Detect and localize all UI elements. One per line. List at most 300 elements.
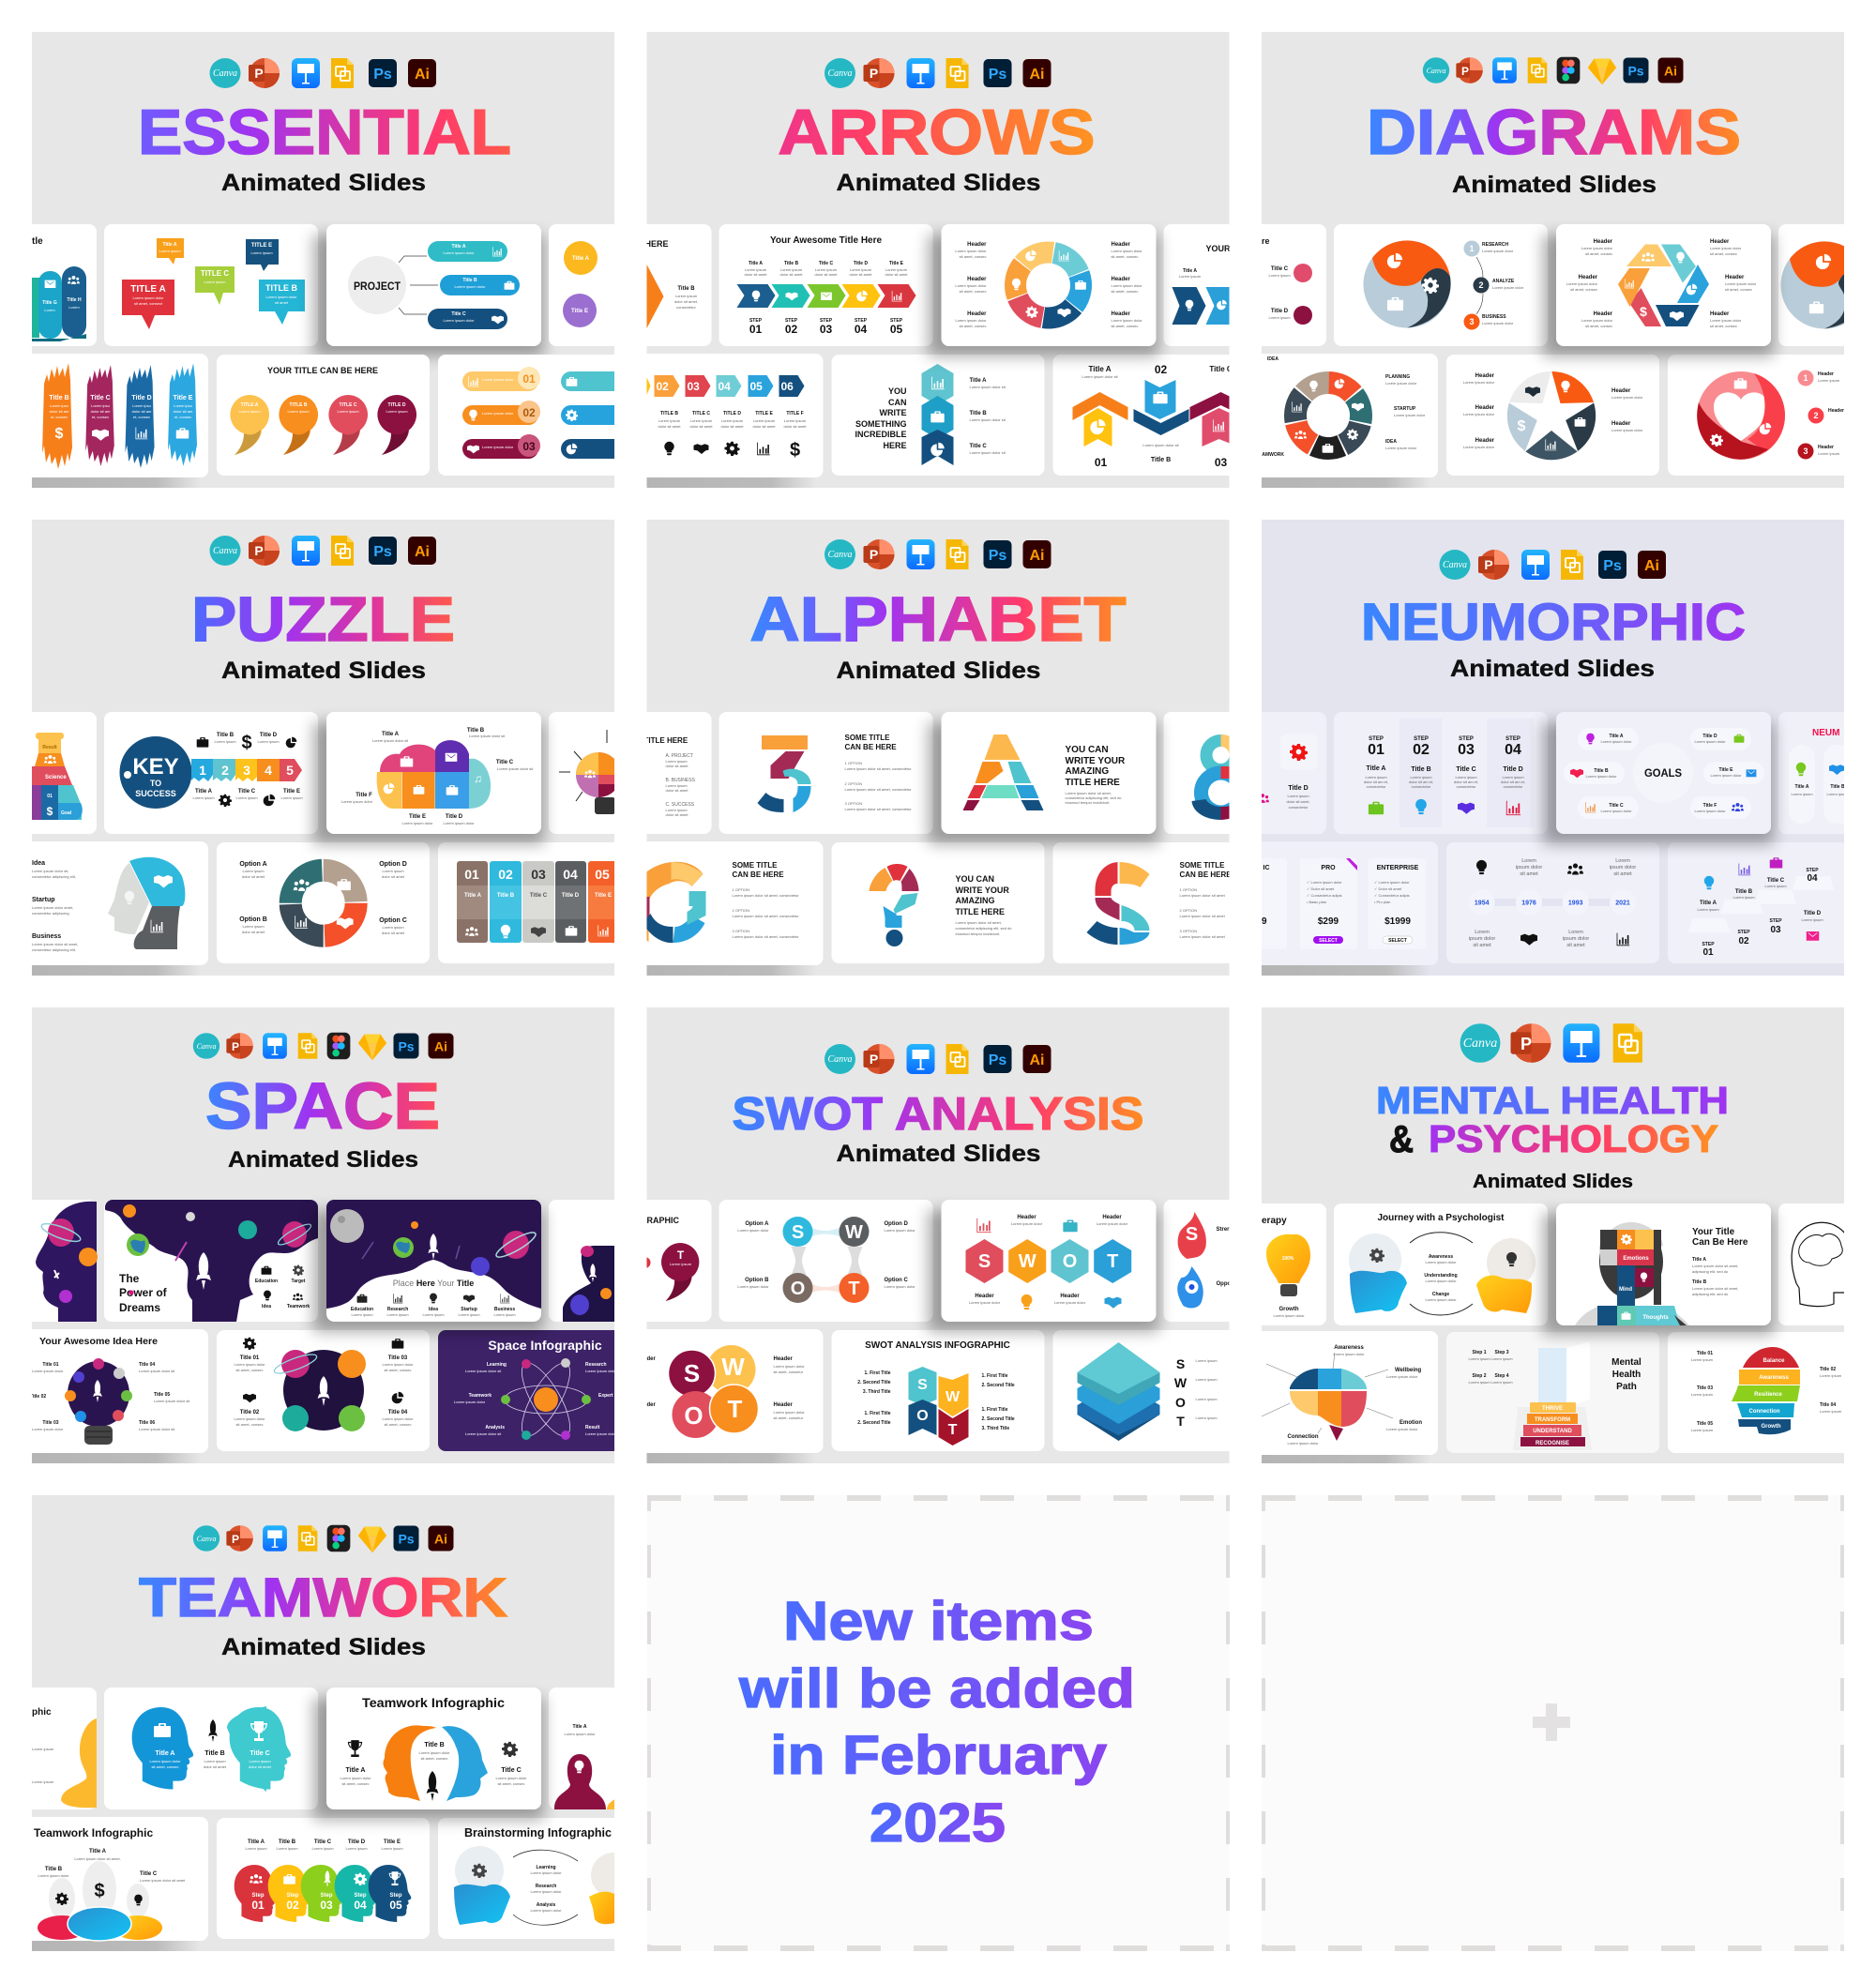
card: vertical ribbon arrows: Title B xyxy=(970,411,987,416)
card: two heads: dolor sit amet xyxy=(204,1764,227,1769)
card: head with pieces: Lorem ipsum dolor sit amet, xyxy=(32,942,78,946)
card: two heads: Lorem ipsum xyxy=(249,1759,271,1764)
card: letter S: 3 OPTION xyxy=(1180,929,1197,933)
card: rising steps: Lorem ipsum xyxy=(1801,917,1823,922)
card: numbered pills: 01 xyxy=(522,372,536,386)
card: rising steps: Title C xyxy=(1767,878,1785,884)
card: watercolour letters: Opportun xyxy=(1216,1281,1242,1287)
card: vertical ribbon arrows: CAN xyxy=(888,398,906,407)
card: quote bubbles: Lorem ipsum xyxy=(287,409,310,414)
card: blobs: Title E xyxy=(571,309,588,314)
card: flask puzzle xyxy=(23,712,97,834)
card: space infographic dark xyxy=(438,1330,626,1451)
card: space infographic dark: Research xyxy=(585,1362,607,1368)
card: chevron ring fragment: Title A xyxy=(1183,268,1197,274)
card: puzzle ring: STARTUP xyxy=(1394,406,1416,412)
card: star ring: Lorem ipsum dolor xyxy=(1611,395,1643,400)
card: five step heads xyxy=(217,1818,430,1939)
card: five step chevrons: 05 xyxy=(890,323,902,336)
card: SWOT hexagons xyxy=(942,1200,1156,1322)
subtitle: Animated Slides xyxy=(837,658,1041,684)
card: four piece ring: Lorem ipsum xyxy=(242,869,265,873)
card: numbered puzzle columns: 01 xyxy=(464,867,479,882)
card: brush strokes: Title B xyxy=(49,395,69,401)
card: teamwork infographic merged heads: Lorem ipsum dolor xyxy=(495,1776,527,1780)
card: three part swirl: Lorem ipsum dolor xyxy=(1482,249,1514,253)
card: space infographic dark: Lorem ipsum dolor xyxy=(454,1400,486,1404)
card: star ring: Header xyxy=(1611,388,1631,394)
card: goals pills: Lorem ipsum dolor xyxy=(1600,809,1632,813)
card: pricing table: IC xyxy=(1263,865,1270,871)
card: pricing table: ✓ Lorem ipsum dolor xyxy=(1374,880,1410,885)
card: head with pieces: Startup xyxy=(32,897,54,903)
card: five step heads: 03 xyxy=(320,1899,333,1912)
card: letter S: Lorem ipsum dolor sit amet xyxy=(1180,893,1226,898)
card: brush strokes: dolor sit am xyxy=(132,409,152,414)
card: goals pills: Lorem ipsum dolor xyxy=(1585,774,1617,779)
card: vertical numbered tabs: dolor sit amet xyxy=(783,424,807,429)
card: speech bubbles: Lorem ipsum xyxy=(250,250,273,255)
card: fragment with maroon head: Title A xyxy=(572,1724,587,1730)
panel: Essential xyxy=(23,32,633,488)
card: cycle ring: Header xyxy=(967,277,987,282)
card: idea bulb: Title 06 xyxy=(139,1420,155,1426)
card: head with pieces: Lorem ipsum dolor sit, xyxy=(32,869,68,873)
card: comma fragment: T xyxy=(677,1249,685,1262)
card: speech bubbles: Lorem ipsum dolor xyxy=(132,295,164,300)
card: timeline: 1954 xyxy=(1475,901,1490,906)
card: head jigsaw: Thoughts xyxy=(1642,1315,1669,1321)
card: four steps: STEP xyxy=(1369,736,1384,742)
card: cloud puzzle: Title C xyxy=(496,760,514,765)
card: five step heads: Step xyxy=(251,1893,265,1899)
card: teamwork balloons: Title C xyxy=(140,1871,158,1877)
card: overlapping SWOT drops: der xyxy=(647,1402,657,1408)
card: chevron ring fragment: YOUR xyxy=(1206,244,1231,253)
card: four steps: Title C xyxy=(1456,766,1476,773)
card: rising steps: Title B xyxy=(1735,889,1753,895)
card: letter three: 3 OPTION xyxy=(844,801,862,806)
card: power of dreams: Target xyxy=(292,1279,306,1284)
card: key to success: KEY xyxy=(132,754,179,780)
card: yellow head fragment: Lorem ipsum xyxy=(32,1747,54,1751)
card: heart swirl: Lorem ipsum xyxy=(1818,451,1840,456)
card: four steps: Lorem ipsum xyxy=(1455,775,1477,780)
card: brain connections: Lorem ipsum dolor xyxy=(1386,1374,1418,1379)
card: power of dreams: The xyxy=(119,1272,140,1285)
card: head with pieces: Business xyxy=(32,933,61,940)
icon row: app logos: P xyxy=(870,1052,878,1067)
card: letter three: Lorem ipsum dolor sit amet, consectetur xyxy=(844,787,912,792)
card: journey with a psychologist: Journey with a Psychologist xyxy=(1377,1213,1505,1223)
card: project mind map: Title A xyxy=(451,244,466,250)
card: up and down arrows: Title B xyxy=(1151,457,1171,463)
card: five step chevrons: Title B xyxy=(784,261,798,266)
card: puzzle ring: IDEA xyxy=(1385,439,1397,445)
card: chevron ring fragment xyxy=(1163,224,1229,346)
card: idea bulb: Lorem ipsum dolor sit xyxy=(154,1399,190,1403)
card: title fragment: Title C xyxy=(1271,266,1289,272)
card: numbered pills: Lorem ipsum dolor xyxy=(482,377,514,382)
card: five step chevrons: Title C xyxy=(819,261,833,266)
card: planets around rocket: Title 04 xyxy=(388,1410,408,1415)
card: letter three: SOME TITLE xyxy=(844,734,890,742)
card: brush strokes: dolor sit am xyxy=(91,409,111,414)
card: timeline: 2021 xyxy=(1615,901,1630,906)
card: flags: Lorem xyxy=(68,305,80,310)
card: vertical numbered tabs: Lorem ipsum xyxy=(721,418,744,423)
card: mental health path: UNDERSTAND xyxy=(1533,1429,1572,1434)
card: vertical ribbon arrows: INCREDIBLE xyxy=(855,430,906,439)
card: up and down arrows: Title A xyxy=(1088,365,1112,373)
card: overlapping SWOT drops: T xyxy=(728,1395,743,1423)
card: overlapping SWOT drops: Header xyxy=(773,1402,794,1408)
card: pricing table: • Basic plan xyxy=(1307,900,1326,904)
card: timeline: sit amet xyxy=(1520,871,1538,877)
card: flask puzzle: Science xyxy=(45,775,67,780)
card: rising steps: Lorem ipsum xyxy=(1732,895,1755,900)
card: five step heads: Lorem ipsum xyxy=(381,1846,403,1851)
card: cycle ring: Header xyxy=(1111,242,1131,248)
card: journey with a psychologist: Understanding xyxy=(1424,1273,1458,1279)
card: five step heads: Title D xyxy=(348,1839,366,1845)
card: brain connections: Lorem ipsum dolor xyxy=(1386,1427,1418,1431)
card: idea bulb: Title 04 xyxy=(139,1362,155,1368)
card: five step chevrons: dolor sit amet xyxy=(885,272,908,277)
card: up and down arrows: Title C xyxy=(1209,365,1233,373)
card: cloud puzzle: Lorem ipsum dolor sit xyxy=(469,734,506,738)
card: vertical ribbon arrows: Title A xyxy=(970,378,987,384)
icon: plus xyxy=(1533,1703,1570,1741)
card: journey with a psychologist: Change xyxy=(1432,1292,1449,1297)
card: letter A xyxy=(942,712,1156,834)
card: project mind map: Lorem ipsum dolor xyxy=(454,284,486,289)
card: pricing table: ✓ Dolor sit amet xyxy=(1307,886,1335,891)
card: layered head: Balance xyxy=(1763,1358,1785,1364)
card: vertical ribbon arrows: Lorem ipsum dolor sit xyxy=(970,385,1006,389)
card: pill fragment: Lorem ipsum xyxy=(1826,792,1849,796)
card: journey with a psychologist: Lorem ipsum dolor xyxy=(1425,1260,1457,1264)
card: idea bulb xyxy=(23,1329,208,1453)
card: cycle ring: Lorem ipsum dolor xyxy=(1111,249,1142,253)
card: timeline: sit amet xyxy=(1613,871,1632,877)
card: four piece ring: Option C xyxy=(379,917,407,924)
card: vertical numbered tabs: 03 xyxy=(687,380,700,393)
card: vertical numbered tabs: TITLE F xyxy=(786,411,804,416)
card: five step heads: Lorem ipsum xyxy=(276,1846,298,1851)
icon row: app logos xyxy=(193,1525,454,1552)
card: text list xyxy=(638,712,711,834)
card: four steps: consectetur xyxy=(1504,784,1523,789)
card: key to success: TO xyxy=(150,779,161,788)
card: layered head: Title 04 xyxy=(1820,1402,1836,1408)
card: teamwork balloons: Lorem ipsum dolor sit amet xyxy=(140,1878,186,1883)
card: SWOT hexagons: O xyxy=(1063,1251,1077,1272)
card: key to success: Title B xyxy=(217,733,234,738)
card: pricing table: PRO xyxy=(1321,865,1336,871)
card: question mark: AMAZING xyxy=(955,896,994,905)
card: text list: Lorem ipsum xyxy=(666,759,688,764)
card: numbered puzzle columns: Title D xyxy=(562,893,580,899)
card: text list: B. BUSINESS xyxy=(666,778,696,783)
card: four piece ring: dolor sit amet xyxy=(242,930,265,934)
card: space infographic dark: Teamwork xyxy=(469,1393,492,1399)
icon row: app logos xyxy=(825,58,1051,88)
card: mental health path: Lorem ipsum xyxy=(1468,1356,1490,1361)
card: head jigsaw: Your Title xyxy=(1692,1227,1735,1237)
card: project mind map: Title C xyxy=(451,311,466,317)
card: vertical numbered tabs: Lorem ipsum xyxy=(690,418,713,423)
card: goals pills: Title A xyxy=(1609,734,1624,739)
card: flask puzzle: Result xyxy=(42,745,57,750)
card: heart swirl: Header xyxy=(1818,371,1834,377)
card: puzzle ring: Lorem ipsum dolor xyxy=(1385,381,1417,386)
card: layered head: Title 03 xyxy=(1697,1385,1713,1391)
card: brush strokes: et, consec xyxy=(92,415,109,419)
card: question mark: WRITE YOUR xyxy=(955,886,1009,895)
card: text list: dolor sit amet xyxy=(666,764,688,768)
card: five step chevrons: 04 xyxy=(855,323,867,336)
card: numbered puzzle columns: 02 xyxy=(498,867,513,882)
card: pill fragment xyxy=(1778,712,1863,834)
card: brain connections: Wellbeing xyxy=(1395,1368,1422,1373)
card: pricing table: $299 xyxy=(1318,916,1339,927)
card: five step heads: Title B xyxy=(279,1839,296,1845)
card: teamwork infographic merged heads: Teamwork Infographic xyxy=(362,1695,505,1710)
card: SWOT hexagons: Lorem ipsum dolor xyxy=(1097,1221,1128,1226)
card: teamwork infographic merged heads: Title B xyxy=(424,1742,445,1748)
card: hexagon cycle: Header xyxy=(1710,311,1730,317)
card: letter three xyxy=(719,712,932,834)
card: planets around rocket: sit amet, consec xyxy=(385,1422,411,1427)
card: mental health path: Step 2 xyxy=(1472,1373,1487,1379)
card: idea bulb: Title 02 xyxy=(30,1394,46,1400)
card: brain connections: Lorem ipsum dolor xyxy=(1287,1441,1319,1446)
card: bulb puzzle xyxy=(549,712,633,834)
card: idea bulb: Title 05 xyxy=(154,1392,170,1398)
card: SWOT hexagons: Header xyxy=(1060,1294,1080,1299)
card: layered stack: Lorem ipsum xyxy=(1195,1358,1218,1363)
card: flask puzzle: 01 xyxy=(47,794,53,799)
card: goals pills: Title D xyxy=(1702,734,1717,739)
card: pricing table: SELECT xyxy=(1319,938,1338,944)
card: SWOT ribbons: T xyxy=(948,1422,958,1438)
card: heart swirl: Header xyxy=(1828,408,1844,414)
card: SWOT ribbons: S xyxy=(917,1377,928,1393)
card: star ring: Lorem ipsum dolor xyxy=(1463,380,1495,385)
subtitle: Animated Slides xyxy=(221,1634,426,1660)
card: therapy bulb: 100% xyxy=(1282,1256,1294,1262)
card: four steps: 01 xyxy=(1368,742,1384,758)
card: cloud puzzle: Title B xyxy=(467,728,485,734)
card: cloud puzzle: ♫ xyxy=(474,772,482,785)
icon row: app logos: Canva xyxy=(827,550,853,560)
card: quote bubbles: Lorem ipsum xyxy=(337,409,359,414)
card: five step chevrons: Lorem ipsum xyxy=(815,267,838,272)
card: flags: Title G xyxy=(42,300,57,306)
card: vertical numbered tabs: TITLE E xyxy=(755,411,773,416)
card: overlapping SWOT drops: sit amet, consetur xyxy=(773,1370,804,1374)
card: layered stack xyxy=(1052,1330,1240,1451)
subtitle: Animated Slides xyxy=(1473,1172,1633,1192)
icon row: app logos: Ps xyxy=(989,548,1006,564)
panel: Teamwork xyxy=(23,1495,636,1951)
card: timeline: 1976 xyxy=(1521,901,1536,906)
card: text list: dolor sit amet xyxy=(666,812,688,817)
card: SWOT hexagons: S xyxy=(978,1251,991,1272)
card: vertical numbered tabs: $ xyxy=(790,440,800,461)
card: SWOT hexagons: Header xyxy=(1102,1215,1122,1220)
icon row: app logos: P xyxy=(1520,1035,1532,1053)
card: SWOT hexagons: Lorem ipsum dolor xyxy=(1054,1300,1086,1305)
icon row: app logos: Ai xyxy=(434,1531,447,1546)
card: vertical numbered tabs: Lorem ipsum xyxy=(753,418,776,423)
card: timeline: ipsum dolor xyxy=(1469,936,1495,942)
card: hexagon cycle: sit amet, consec xyxy=(1710,251,1737,256)
card: four piece ring: dolor sit amet xyxy=(242,874,265,879)
card: five step chevrons xyxy=(719,224,932,346)
card: yellow head fragment: Lorem ipsum xyxy=(32,1779,54,1784)
card: four steps: 02 xyxy=(1413,742,1430,758)
title: TEAMWORK xyxy=(139,1567,507,1628)
card: puzzle ring: IDEA xyxy=(1267,356,1278,362)
card: power of dreams: Dreams xyxy=(119,1301,160,1314)
card: five step chevrons: 01 xyxy=(749,323,762,336)
card: hexagon cycle: $ xyxy=(1640,304,1647,319)
card: SWOT ribbons: 2. Second Title xyxy=(981,1383,1015,1388)
card: rising steps: Title D xyxy=(1804,911,1822,916)
card: quote bubbles: Lorem ipsum xyxy=(238,409,261,414)
card: timeline xyxy=(1446,842,1659,963)
card: puzzle ring: Lorem ipsum dolor xyxy=(1394,413,1426,417)
card: vertical ribbon arrows: Lorem ipsum dolor sit xyxy=(970,417,1006,422)
card: cycle ring: Lorem ipsum dolor xyxy=(1111,318,1142,323)
card: layered stack: T xyxy=(1176,1414,1185,1429)
card: speech bubbles: Lorem ipsum dolor xyxy=(265,295,297,299)
card: up and down arrows xyxy=(1052,355,1229,476)
card: five step heads: Step xyxy=(286,1893,299,1899)
panel: New items placeholder xyxy=(647,1495,1230,1951)
card: flask puzzle: Goal xyxy=(61,810,72,816)
card: four steps: 04 xyxy=(1505,742,1521,758)
card: layered stack: Lorem ipsum xyxy=(1195,1377,1218,1382)
card: key to success: Title A xyxy=(195,789,213,795)
card: place here your title dark: Lorem ipsum xyxy=(351,1312,373,1317)
card: journey with a psychologist: Lorem ipsum dolor xyxy=(1425,1297,1457,1302)
card: teamwork balloons: Lorem ipsum dolor xyxy=(38,1873,69,1878)
card: layered head: Title 05 xyxy=(1697,1421,1713,1427)
card: numbered pills: 02 xyxy=(522,406,536,419)
card: puzzle ring: Lorem ipsum dolor xyxy=(1385,446,1417,450)
text: new items message: will be added xyxy=(738,1658,1135,1719)
card: four piece ring xyxy=(217,842,430,963)
card: timeline: sit amet xyxy=(1473,943,1491,948)
card: pricing table: ✓ Consectetur adipis xyxy=(1374,893,1410,898)
card: brush strokes: et, consec xyxy=(133,415,150,419)
card: power of dreams xyxy=(104,1200,318,1322)
card: five step chevrons: STEP xyxy=(890,318,903,324)
card: five step chevrons: STEP xyxy=(820,318,833,324)
icon row: app logos xyxy=(193,1033,454,1060)
card: brush strokes xyxy=(23,354,208,477)
card: vertical numbered tabs: dolor sit amet xyxy=(752,424,776,429)
card: letter A: consectetur adipiscing elit, sed do xyxy=(1066,795,1122,800)
card: brainstorming: Lorem ipsum dolor xyxy=(530,1889,562,1894)
card: place here your title dark xyxy=(326,1200,541,1322)
card: place here your title dark: Idea xyxy=(429,1307,438,1312)
card: five step heads: Step xyxy=(389,1893,402,1899)
card: place here your title dark: Startup xyxy=(461,1307,477,1312)
card: pill fragment: Title B xyxy=(1830,784,1845,790)
card: idea bulb: Title 03 xyxy=(42,1420,59,1426)
card: head with pieces: Idea xyxy=(32,860,45,867)
card: teamwork infographic merged heads: Lorem ipsum dolor xyxy=(418,1750,450,1755)
card: pricing table: 9 xyxy=(1262,916,1267,927)
card: teamwork infographic merged heads xyxy=(326,1688,541,1809)
card: hexagon cycle: Header xyxy=(1710,239,1730,245)
card: three part swirl: 3 xyxy=(1469,317,1475,326)
title: SWOT ANALYSIS xyxy=(732,1089,1144,1140)
card: key to success: Lorem ipsum xyxy=(214,739,236,744)
card: five step chevrons: Title D xyxy=(854,261,868,266)
card: five step heads: 01 xyxy=(251,1899,265,1912)
card: layered head: Title 02 xyxy=(1820,1367,1836,1372)
card: mental health path: Path xyxy=(1616,1382,1637,1392)
card: five step heads: Lorem ipsum xyxy=(311,1846,334,1851)
card: brainstorming: Learning xyxy=(536,1865,556,1870)
card: rising steps: 04 xyxy=(1807,873,1818,884)
icon row: app logos: P xyxy=(870,547,878,562)
card: overlapping SWOT drops: Lorem ipsum dolor xyxy=(773,1364,805,1369)
card: SWOT circles: T xyxy=(848,1279,860,1299)
card: SWOT ribbons: SWOT ANALYSIS INFOGRAPHIC xyxy=(865,1340,1010,1351)
card: hexagon cycle: sit amet, consec xyxy=(1570,287,1597,292)
card: three part swirl: Lorem ipsum dolor xyxy=(1492,285,1524,290)
card: space infographic dark: Lorem ipsum dolor xyxy=(585,1431,617,1436)
card: cycle ring: sit amet, consec xyxy=(960,324,987,328)
card: SWOT circles: Option B xyxy=(745,1278,769,1283)
card: vertical ribbon arrows xyxy=(831,355,1045,476)
card: head with pieces: consectetur adipiscing elit, xyxy=(32,947,76,952)
icon row: app logos: P xyxy=(254,66,264,81)
card: head jigsaw: Mind xyxy=(1619,1287,1632,1293)
card: brush strokes: Title D xyxy=(131,395,152,401)
card: cycle ring: sit amet, consec xyxy=(960,289,987,294)
card: speech bubbles xyxy=(104,224,318,346)
card: head jigsaw: adipiscing elit, sed do xyxy=(1692,1269,1729,1274)
subtitle: Animated Slides xyxy=(1452,172,1657,198)
card: letter G: Lorem ipsum dolor sit amet, consectetur xyxy=(732,914,799,918)
card: question mark: consectetur adipiscing elit, sed do xyxy=(955,926,1012,931)
card: gear tile: dolor sit amet, xyxy=(1286,799,1310,804)
card: vertical numbered tabs: 04 xyxy=(719,380,731,393)
card: title fragment: Lorem ipsum xyxy=(1268,273,1291,278)
card: therapy bulb: Lorem ipsum dolor xyxy=(1273,1313,1305,1318)
card: head with pieces: consectetur adipiscing xyxy=(32,911,69,916)
card: key to success: 5 xyxy=(286,763,294,778)
title: SPACE xyxy=(205,1069,440,1143)
card: speech bubbles: TITLE E xyxy=(251,243,272,249)
card: brainstorming: Research xyxy=(536,1884,556,1889)
icon row: app logos: Ps xyxy=(1603,558,1622,574)
card: flags xyxy=(32,224,97,346)
card: star ring: Lorem ipsum dolor xyxy=(1463,412,1495,416)
card: rising steps: STEP xyxy=(1737,930,1750,935)
card: cycle ring xyxy=(942,224,1156,346)
card: vertical numbered tabs: 05 xyxy=(750,380,763,393)
icon row: app logos xyxy=(210,58,436,88)
card: question mark: TITLE HERE xyxy=(955,907,1005,916)
